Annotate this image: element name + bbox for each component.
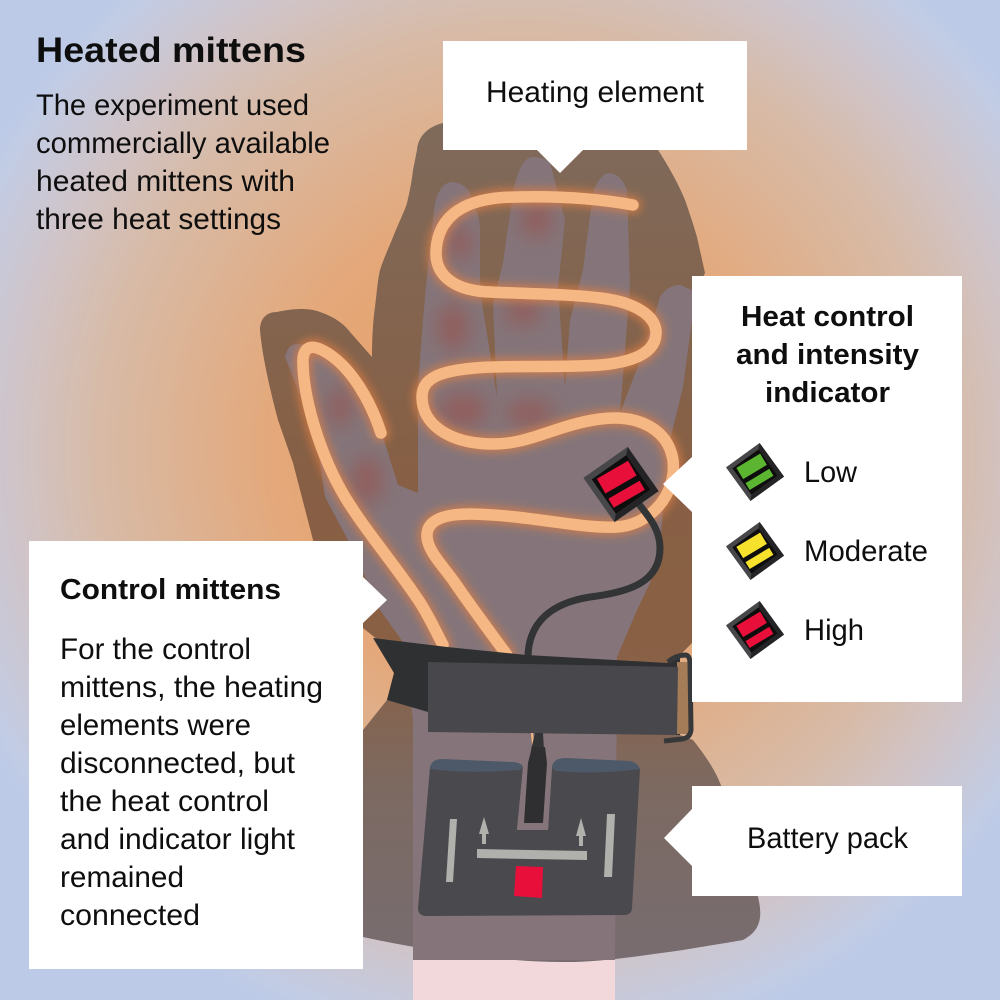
intro text: The experiment used (36, 89, 309, 122)
intro text: commercially available (36, 127, 330, 160)
heading (736, 301, 919, 409)
body text: connected (60, 899, 200, 932)
body text: and indicator light (60, 823, 296, 856)
buckle (664, 655, 691, 741)
control cable (528, 503, 660, 658)
illustration: hand in heated mitten (260, 123, 760, 1000)
heading: indicator (765, 377, 890, 409)
strap panel (428, 662, 678, 735)
body text: For the control (60, 633, 251, 666)
heat control on mitten (583, 447, 659, 522)
body text (60, 633, 323, 932)
intro text (36, 89, 330, 236)
legend: low (726, 443, 857, 501)
body text: mittens, the heating (60, 671, 323, 704)
body text: the heat control (60, 785, 269, 818)
heading: and intensity (736, 339, 919, 371)
callout: heating element: Heating element (486, 76, 705, 109)
heating element wire (303, 197, 673, 655)
strap (373, 638, 680, 735)
legend: moderate: Moderate (804, 535, 928, 568)
heating element glow (303, 197, 673, 655)
wrist skin (413, 940, 615, 1000)
callout: battery pack: Battery pack (747, 822, 909, 855)
body text: remained (60, 861, 184, 894)
panel: heat control and intensity indicator (663, 276, 962, 702)
legend: moderate (726, 522, 928, 580)
legend: high (726, 601, 864, 659)
battery cable (531, 733, 544, 750)
panel: control mittens (29, 541, 387, 969)
body text: disconnected, but (60, 747, 296, 780)
legend: high: High (804, 614, 864, 647)
callout: heating element (443, 41, 747, 173)
warm spots on hand (328, 202, 554, 504)
title: Heated mittens (36, 31, 306, 70)
hand shape inside mitten (285, 157, 692, 960)
heading: Control mittens (60, 574, 281, 606)
heading: Heat control (741, 301, 914, 333)
intro text: three heat settings (36, 203, 281, 236)
title block (36, 31, 330, 236)
intro text: heated mittens with (36, 165, 295, 198)
battery pack (418, 747, 640, 916)
legend: low: Low (804, 456, 857, 489)
body text: elements were (60, 709, 251, 742)
mitten outer silhouette (260, 123, 760, 962)
callout: battery pack (664, 786, 962, 896)
